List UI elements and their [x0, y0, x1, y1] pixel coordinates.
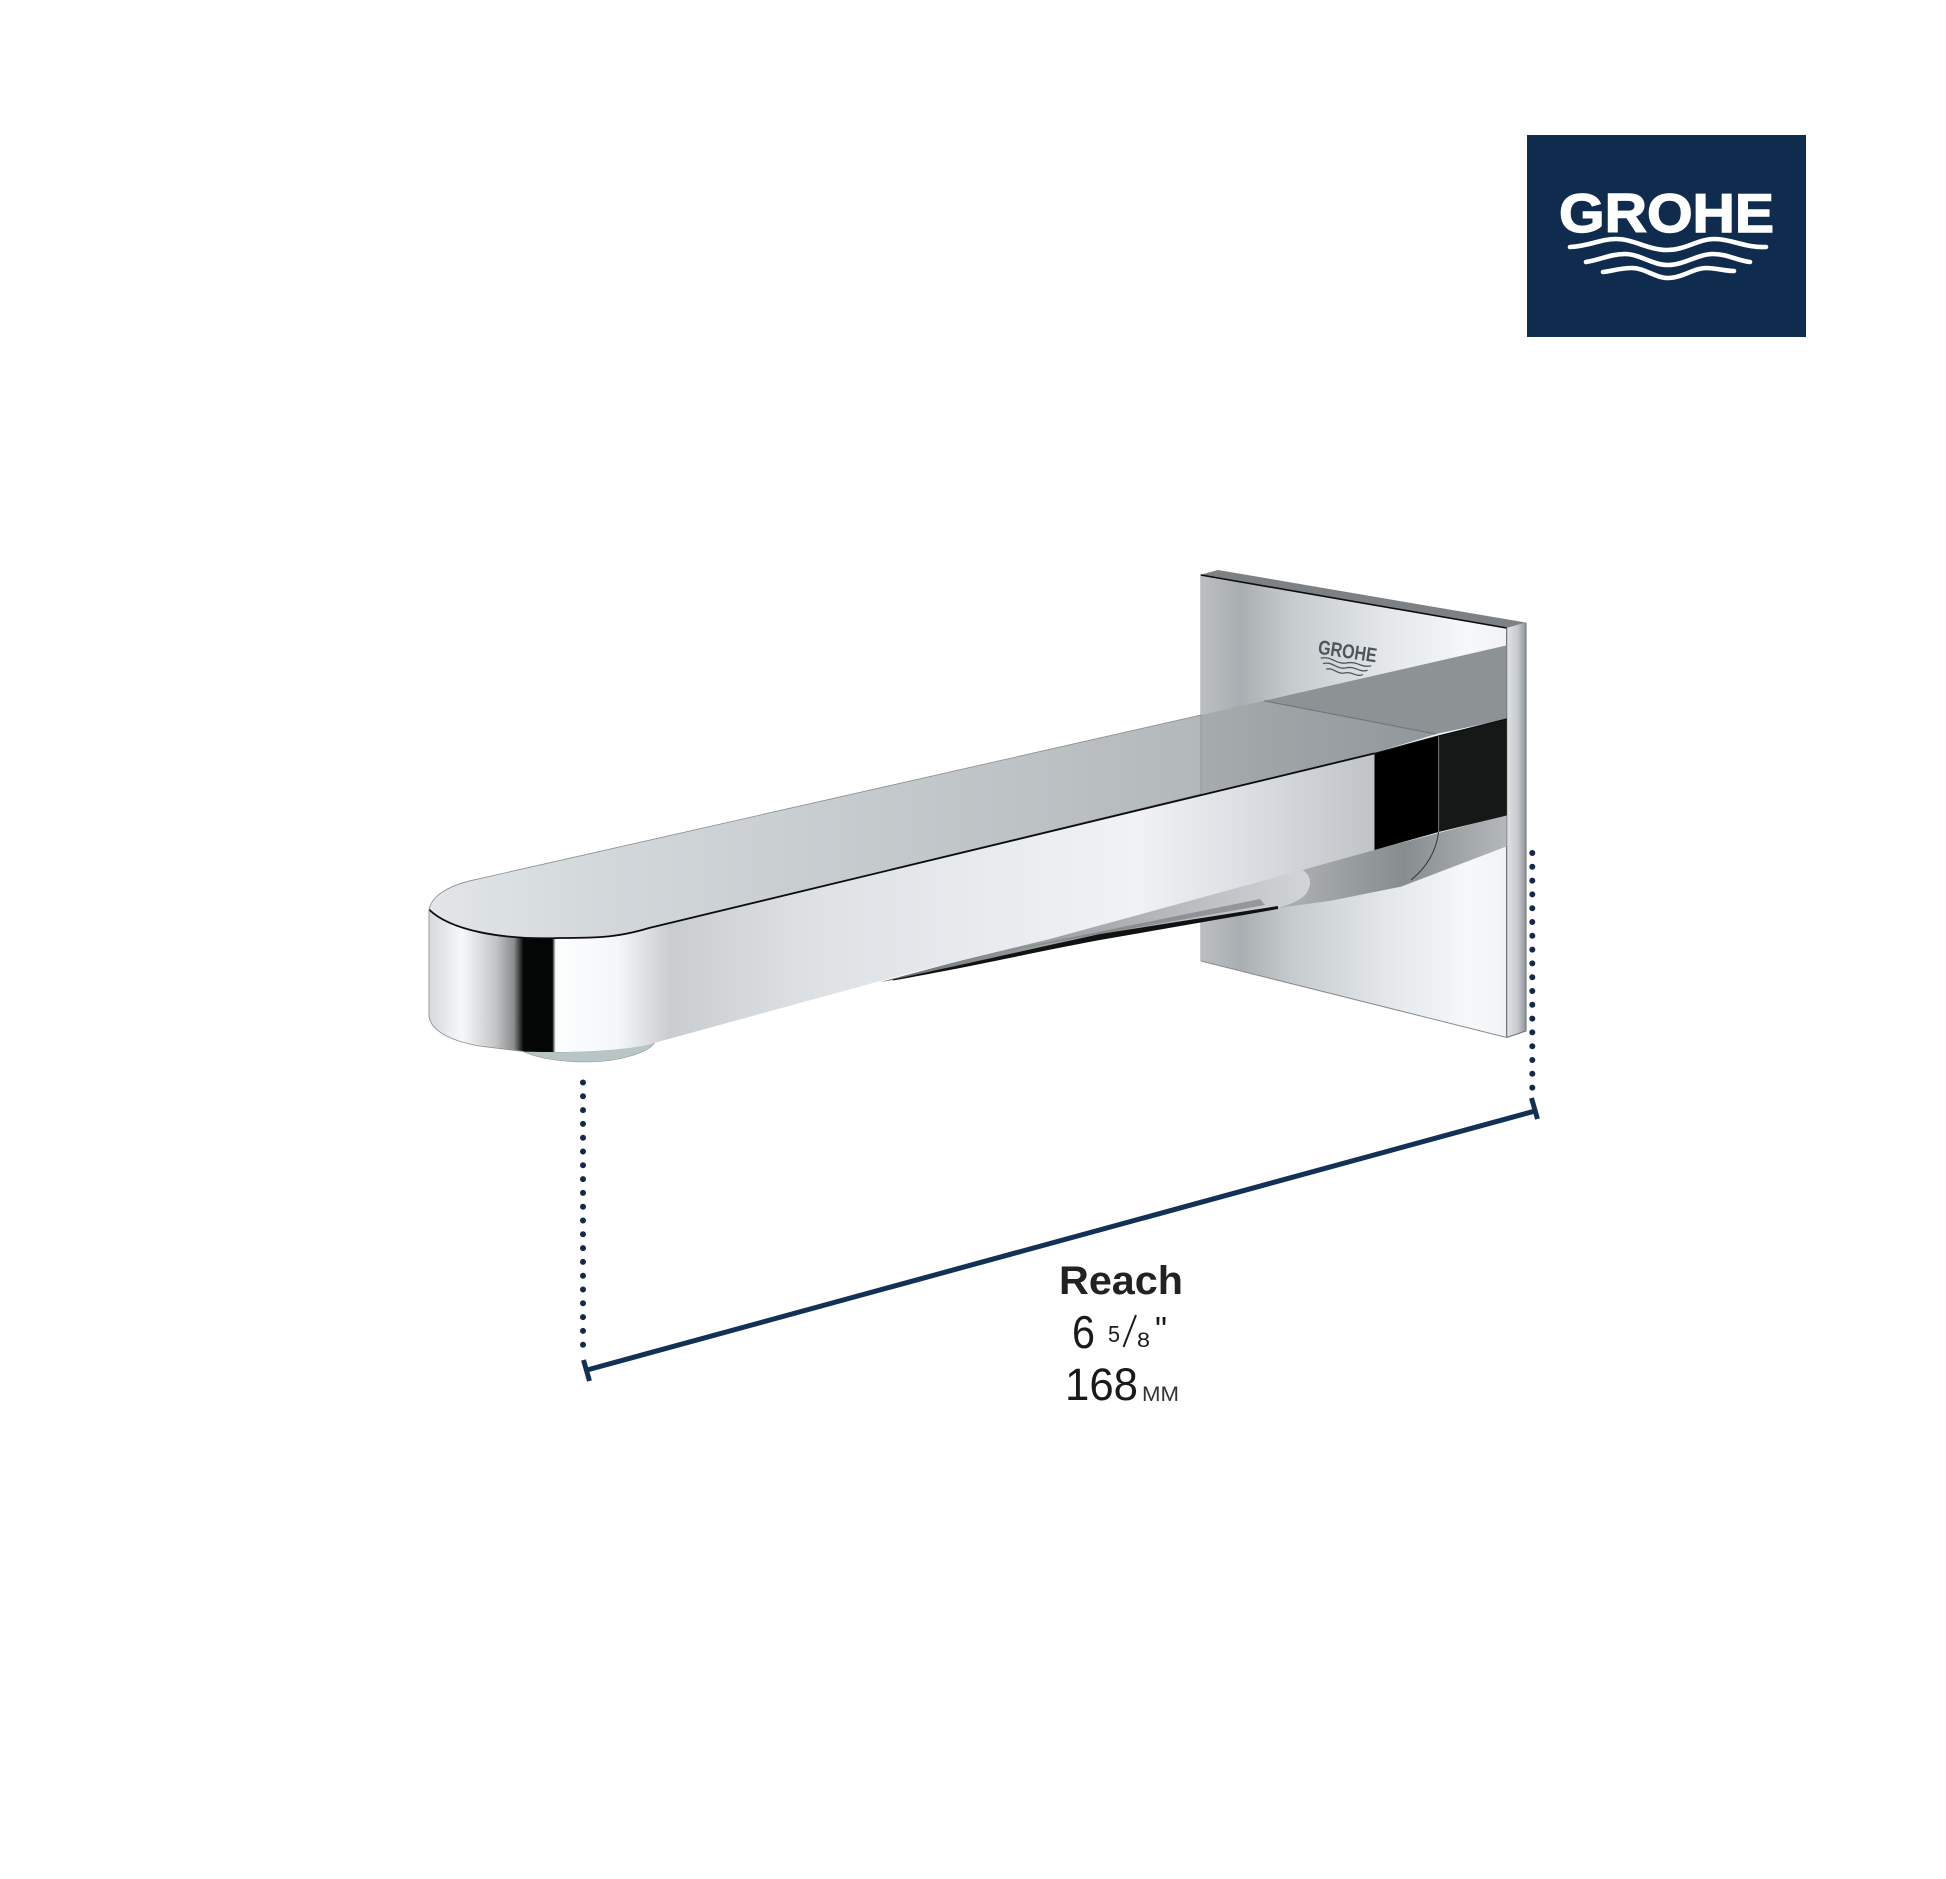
spout edge highlights	[429, 719, 1507, 1052]
dark facets near plate	[1374, 719, 1507, 880]
logo: GROHE	[1527, 135, 1806, 337]
label heading: Reach	[1059, 1259, 1183, 1303]
spout top face	[429, 715, 1201, 938]
spout body	[429, 753, 1374, 1052]
metric value	[1065, 1359, 1179, 1410]
imperial value: 8	[1137, 1329, 1150, 1352]
product: wall spout	[429, 570, 1526, 1062]
logo wordmark: GROHE	[1559, 182, 1774, 244]
imperial value: 5	[1108, 1321, 1120, 1347]
dotted extension line: right	[1529, 853, 1535, 1096]
label: reach measurement	[1059, 1259, 1183, 1410]
imperial value: "	[1155, 1309, 1167, 1350]
plate engraved logo	[1315, 637, 1378, 678]
plate reflection, lower	[1278, 815, 1507, 908]
dimension line	[584, 1098, 1538, 1381]
logo waves	[1570, 239, 1766, 278]
dotted extension line: left	[580, 1082, 586, 1348]
metric value: 168	[1065, 1359, 1138, 1410]
spout underside taper	[880, 870, 1310, 982]
imperial value	[1072, 1306, 1167, 1358]
spout aerator	[520, 1042, 655, 1062]
plate reflection, upper	[1201, 645, 1507, 794]
plate engraved logo: GROHE	[1317, 637, 1378, 667]
imperial value: 6	[1072, 1306, 1095, 1358]
metric value: MM	[1142, 1383, 1179, 1406]
back plate	[1201, 570, 1526, 1038]
